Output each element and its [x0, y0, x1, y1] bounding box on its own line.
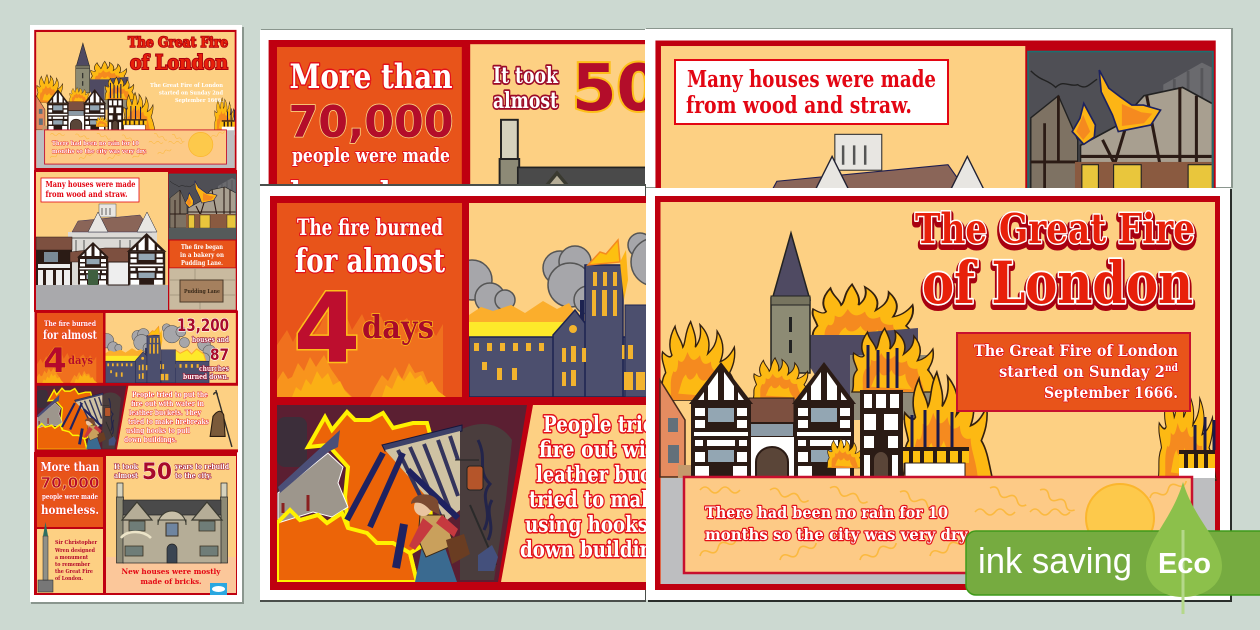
thumbnail panel: four days and 13,200 houses: People tried to put the: [132, 390, 208, 399]
poster: The Great Fire of London main: [646, 188, 1232, 602]
thumbnail panel: homeless and rebuilding: years to rebuild: [174, 462, 229, 471]
thumbnail panel: four days and 13,200 houses: 4: [43, 341, 67, 381]
thumbnail panel: homeless and rebuilding: [34, 452, 237, 595]
badge: ink saving Eco: ink saving: [978, 540, 1132, 581]
poster: more than 70,000 homeless: 50: [572, 52, 661, 126]
poster: thumbnail sheet overview: [30, 25, 244, 604]
heading: fire duration: days: [362, 308, 434, 346]
text block: firefighting methods: People tried to put the: [543, 412, 775, 438]
thumbnail panel: four days and 13,200 houses: houses and: [192, 335, 229, 344]
thumbnail panel: Great Fire title: [34, 30, 236, 170]
callout: start date: started on Sunday 2: [999, 362, 1179, 381]
thumbnail panel: homeless and rebuilding: made of bricks.: [140, 577, 202, 586]
thumbnail panel: houses of wood and straw: Pudding Lane: [184, 289, 220, 295]
callout: start date: [957, 333, 1190, 411]
thumbnail panel: four days and 13,200 houses: 13,200: [177, 316, 229, 336]
callout: start date: The Great Fire of London: [974, 341, 1178, 360]
thumbnail panel: four days and 13,200 houses: down buildings.: [124, 435, 177, 444]
thumbnail panel: homeless and rebuilding: the Great Fire: [55, 569, 94, 575]
title: The Great Fire: [915, 205, 1195, 253]
thumbnail panel: Great Fire title: The Great Fire of London: [150, 83, 224, 89]
thumbnail panel: houses of wood and straw: Pudding Lane.: [181, 260, 223, 267]
thumbnail panel: houses of wood and straw: Many houses were made: [46, 179, 136, 189]
thumbnail panel: homeless and rebuilding: of London.: [55, 576, 83, 582]
text block: firefighting methods: using hooks to pull: [525, 512, 721, 538]
thumbnail panel: homeless and rebuilding: 70,000: [40, 474, 100, 492]
callout: start date: September 1666.: [1044, 383, 1178, 402]
poster: more than 70,000 homeless: almost: [493, 88, 559, 114]
thumbnail panel: Great Fire title: of London: [130, 50, 228, 74]
text block: firefighting methods: tried to make firebreaks: [529, 487, 773, 513]
poster: more than 70,000 homeless: 70,000: [288, 97, 454, 148]
thumbnail panel: four days and 13,200 houses: using hooks to pull: [126, 426, 190, 435]
thumbnail panel: four days and 13,200 houses: The fire burned: [44, 319, 96, 328]
thumbnail panel: four days and 13,200 houses: days: [68, 354, 93, 367]
thumbnail panel: homeless and rebuilding: a monument: [55, 555, 88, 561]
thumbnail panel: Great Fire title: started on Sunday 2nd: [159, 90, 223, 96]
poster: houses of wood and straw: [645, 28, 1233, 432]
thumbnail panel: homeless and rebuilding: almost: [114, 471, 138, 480]
title: of London: [922, 252, 1193, 320]
heading: fire duration: The fire burned: [297, 215, 443, 241]
poster: more than 70,000 homeless: It took: [493, 63, 559, 89]
thumbnail panel: homeless and rebuilding: to the city.: [175, 471, 212, 480]
heading: fire duration: for almost: [295, 241, 446, 280]
thumbnail panel: Great Fire title: September 1666.: [175, 98, 223, 104]
poster: more than 70,000 homeless: people were made: [292, 143, 450, 167]
heading: fire duration: [294, 215, 446, 385]
text block: firefighting methods: [520, 412, 775, 563]
thumbnail panel: homeless and rebuilding: people were made: [42, 492, 98, 501]
badge: ink saving Eco: Eco: [1158, 548, 1211, 580]
text block: no rain: months so the city was very dry.: [705, 525, 971, 544]
icon: leaf: [1146, 482, 1222, 614]
thumbnail panel: four days and 13,200 houses: 87: [210, 345, 229, 364]
thumbnail panel: Great Fire title: There had been no rain for 10: [52, 141, 139, 147]
thumbnail panel: homeless and rebuilding: It took: [114, 462, 138, 471]
thumbnail panel: four days and 13,200 houses: [34, 310, 238, 452]
thumbnail panel: houses of wood and straw: in a bakery on: [180, 252, 224, 259]
title: The Great Fire: [915, 208, 1195, 256]
icon: publisher logo: [210, 583, 227, 595]
text block: firefighting methods: fire out with water in: [539, 437, 761, 463]
poster: more than 70,000 homeless: More than: [290, 57, 452, 97]
thumbnail panel: Great Fire title: The Great Fire: [128, 35, 228, 51]
text block: firefighting methods: down buildings.: [520, 537, 682, 563]
poster: houses of wood and straw: Many houses were made: [687, 66, 936, 93]
thumbnail panel: four days and 13,200 houses: burned down.: [183, 372, 229, 381]
thumbnail panel: houses of wood and straw: from wood and straw.: [46, 189, 128, 199]
poster: more than 70,000 homeless: homeless.: [290, 175, 452, 217]
poster: houses of wood and straw: from wood and straw.: [686, 92, 912, 119]
title: of London: [922, 249, 1193, 317]
heading: fire duration: 4: [294, 273, 360, 385]
badge: ink saving Eco: [966, 482, 1260, 614]
thumbnail panel: homeless and rebuilding: to remember: [55, 562, 90, 568]
callout: start date: nd: [1165, 363, 1178, 374]
thumbnail panel: four days and 13,200 houses: leather buckets. They: [129, 408, 202, 417]
text block: no rain: There had been no rain for 10: [705, 503, 948, 522]
thumbnail panel: Great Fire title: months so the city was very dry.: [52, 149, 147, 155]
poster: more than 70,000 homeless: [260, 29, 837, 433]
thumbnail panel: four days and 13,200 houses: fire out with water in: [131, 399, 204, 408]
thumbnail panel: homeless and rebuilding: New houses were mostly: [122, 567, 221, 576]
thumbnail panel: houses of wood and straw: The fire began: [181, 244, 223, 251]
thumbnail panel: homeless and rebuilding: 50: [142, 460, 172, 485]
thumbnail panel: four days and 13,200 houses: tried to make firebreaks: [128, 417, 209, 426]
thumbnail panel: homeless and rebuilding: More than: [40, 460, 100, 474]
thumbnail panel: homeless and rebuilding: homeless.: [41, 503, 99, 517]
title: [915, 205, 1195, 320]
text block: firefighting methods: leather buckets. They: [536, 462, 755, 488]
thumbnail panel: homeless and rebuilding: Sir Christopher: [55, 540, 97, 546]
poster: fire burned for almost 4 days: [260, 184, 840, 602]
thumbnail panel: houses of wood and straw: [34, 170, 237, 312]
thumbnail panel: homeless and rebuilding: Wren designed: [54, 548, 95, 554]
thumbnail panel: four days and 13,200 houses: for almost: [43, 328, 97, 342]
text block: no rain: [705, 503, 971, 544]
thumbnail panel: four days and 13,200 houses: churches: [199, 364, 229, 373]
